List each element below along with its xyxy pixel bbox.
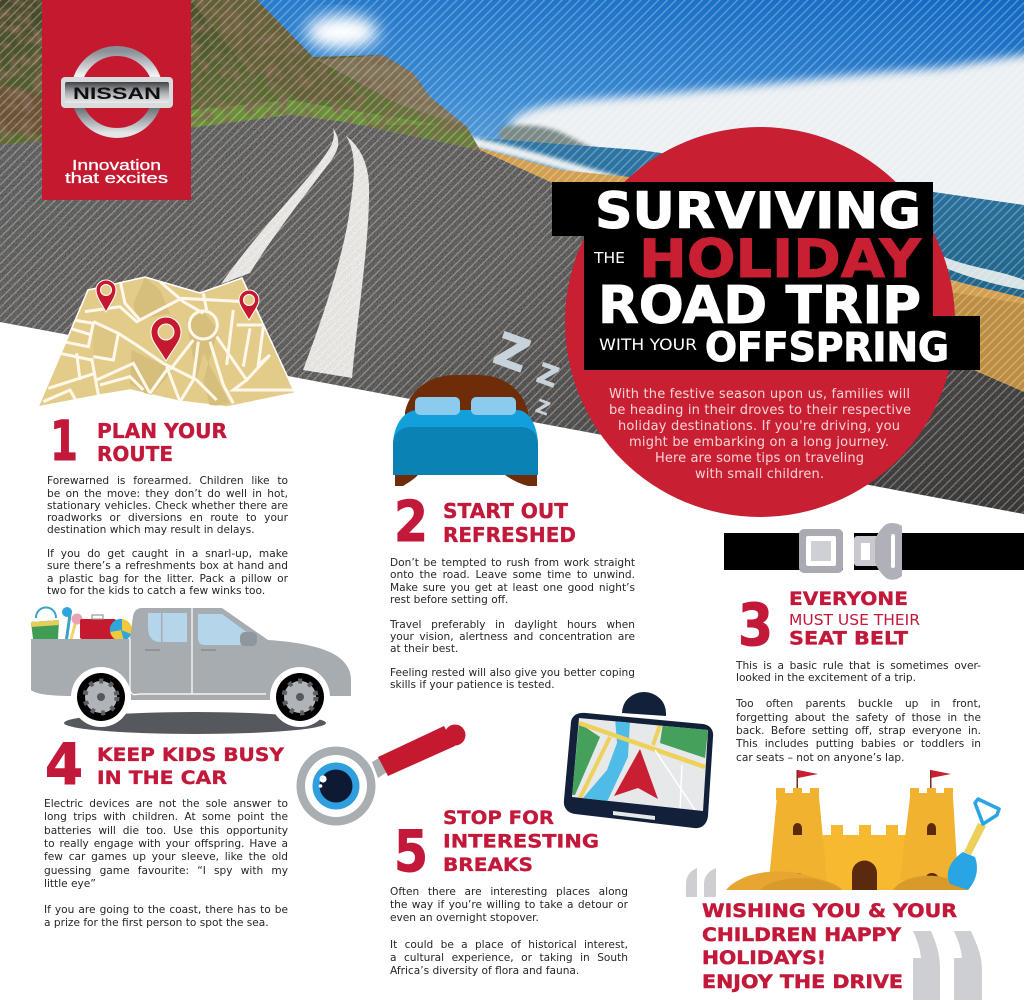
text block xyxy=(47,548,288,597)
closing message: ENJOY THE DRIVE xyxy=(702,972,903,993)
icon: magnifying glass with eye xyxy=(296,724,466,826)
icon: Nissan ring emblem xyxy=(61,51,173,133)
icon: gps navigator xyxy=(564,692,713,828)
text block: be on the move: they don’t do well in hot, xyxy=(47,488,288,500)
heading: 1 plan your route xyxy=(50,409,227,473)
text block xyxy=(44,904,288,929)
heading: 2 start out refreshed: 2 xyxy=(394,490,428,555)
heading: 1 plan your route: PLAN YOUR xyxy=(97,419,227,443)
text block xyxy=(390,667,635,691)
panel: title and intro circle xyxy=(552,127,980,517)
text block: rest before setting off. xyxy=(390,594,508,606)
heading: 3 everyone must use their seat belt: 3 xyxy=(738,591,773,659)
intro text: Here are some tips on traveling xyxy=(655,451,864,466)
text block: the way if you’re willing to take a detour or xyxy=(390,898,628,910)
icon: sandcastle with spade xyxy=(726,770,999,890)
text block: roadworks or diversions en route to your xyxy=(47,512,288,524)
heading: 5 stop for interesting breaks: STOP FOR xyxy=(443,807,554,829)
tagline: that excites xyxy=(65,171,168,187)
title banner xyxy=(552,182,980,371)
text block: your vision, alertness and concentration are xyxy=(390,631,635,643)
heading: 2 start out refreshed: START OUT xyxy=(443,499,568,523)
heading: 5 stop for interesting breaks: 5 xyxy=(394,819,428,885)
icon: folded map with pins xyxy=(38,277,295,407)
photo: coastal road background xyxy=(0,0,1024,514)
intro text: holiday destinations. If you're driving, you xyxy=(618,419,900,434)
text block: car seats – not on anyone’s lap. xyxy=(736,752,905,764)
text block: skills if your patience is tested. xyxy=(390,679,555,691)
text block: If you are going to the coast, there has to be xyxy=(44,904,288,916)
heading: 4 keep kids busy in the car: KEEP KIDS BUSY xyxy=(97,744,284,766)
text block: batteries will die too. Use this opportunity xyxy=(44,825,288,837)
intro text: with small children. xyxy=(695,467,824,482)
closing message: CHILDREN HAPPY xyxy=(702,925,902,946)
heading: 1 plan your route: ROUTE xyxy=(97,442,173,466)
pin xyxy=(239,290,259,320)
intro text xyxy=(609,387,911,482)
heading: 3 everyone must use their seat belt: MUST USE THEIR xyxy=(789,611,920,629)
text block: Make sure you get at least one good night’s xyxy=(390,582,635,594)
title banner: WITH YOUR xyxy=(599,335,697,354)
panel: 4 keep kids busy in the car xyxy=(31,606,466,929)
heading: 3 everyone must use their seat belt xyxy=(738,588,920,659)
intro text: might be embarking on a long journey. xyxy=(629,435,889,450)
intro text: be heading in their droves to their respective xyxy=(609,403,911,418)
text block xyxy=(736,698,981,764)
text block xyxy=(47,475,288,536)
text block: Feeling rested will also give you better coping xyxy=(390,667,635,679)
intro text: With the festive season upon us, families will xyxy=(609,387,910,402)
icon: pickup truck xyxy=(31,607,351,734)
icon: bed with z letters: Z xyxy=(532,395,553,421)
text block: destination which may result in delays. xyxy=(47,524,255,536)
text block: It could be a place of historical interest, xyxy=(390,938,628,950)
icon: bed with z letters xyxy=(393,322,563,486)
text block: few car games up your sleeve, like the old xyxy=(44,851,288,863)
wheel xyxy=(276,673,324,721)
wheel xyxy=(77,673,125,721)
closing message: HOLIDAYS! xyxy=(702,948,826,969)
icon: bed with z letters: Z xyxy=(533,356,563,394)
red circle xyxy=(565,127,955,517)
heading: 1 plan your route: 1 xyxy=(50,409,78,473)
heading: 4 keep kids busy in the car: IN THE CAR xyxy=(97,767,227,789)
panel: 2 start out refreshed xyxy=(390,322,635,691)
text block: Too often parents buckle up in front, xyxy=(736,698,981,710)
text block: a cultural experience, or taking in South xyxy=(390,952,628,964)
title banner: SURVIVING xyxy=(595,182,921,240)
heading: 5 stop for interesting breaks: BREAKS xyxy=(443,854,533,876)
heading: 5 stop for interesting breaks xyxy=(394,807,599,885)
panel: closing wish with sandcastle xyxy=(686,770,1001,1000)
text block: back. Before setting off, strap everyone in. xyxy=(736,725,981,737)
text block: little eye” xyxy=(44,878,96,890)
text block xyxy=(390,619,635,655)
text block: Forewarned is forearmed. Children like to xyxy=(47,475,288,487)
text block: Electric devices are not the sole answer to xyxy=(44,798,288,810)
text block: two for the kids to catch a few winks too. xyxy=(47,585,265,597)
text block: onto the road. Leave some time to unwind. xyxy=(390,569,635,581)
closing message: WISHING YOU & YOUR xyxy=(702,901,957,922)
text block: stationary vehicles. Check whether there are xyxy=(47,500,288,512)
pin xyxy=(151,317,181,361)
text block: even an overnight stopover. xyxy=(390,912,539,924)
text block xyxy=(390,938,628,976)
heading: 3 everyone must use their seat belt: EVERYONE xyxy=(789,588,908,610)
text block: This is a basic rule that is sometimes over- xyxy=(736,660,981,672)
heading: 2 start out refreshed: REFRESHED xyxy=(443,523,576,547)
text block: forgetting about the safety of those in the xyxy=(736,712,981,724)
tagline xyxy=(65,158,168,187)
brand panel: Nissan logo xyxy=(42,0,191,200)
text block: to really engage with your offspring. Have a xyxy=(44,838,288,850)
text block: looked in the excitement of a trip. xyxy=(736,672,916,684)
heading: 2 start out refreshed xyxy=(394,490,576,555)
text block: Often there are interesting places along xyxy=(390,886,628,898)
title banner: ROAD TRIP xyxy=(598,276,921,336)
panel: 1 plan your route xyxy=(39,276,294,597)
text block: Travel preferably in daylight hours when xyxy=(390,619,635,631)
icon: closing quote mark xyxy=(913,931,982,1000)
text block: long trips with children. At some point the xyxy=(44,811,288,823)
text block: sure there’s a refreshments box at hand and xyxy=(47,560,288,572)
text block: a prize for the first person to spot the sea. xyxy=(44,917,269,929)
closing message xyxy=(702,901,957,993)
icon: Nissan ring emblem: NISSAN xyxy=(73,84,161,103)
text block: Don’t be tempted to rush from work straight xyxy=(390,557,635,569)
text block xyxy=(390,557,635,606)
heading: 3 everyone must use their seat belt: SEAT BELT xyxy=(789,628,908,650)
panel: 5 stop for interesting breaks xyxy=(390,692,714,976)
text block xyxy=(44,798,288,890)
text block: Africa’s diversity of flora and fauna. xyxy=(390,964,579,976)
text block: a plastic bag for the litter. Pack a pillow or xyxy=(47,573,288,585)
text block xyxy=(736,660,981,684)
icon: seat belt buckle xyxy=(724,523,1024,580)
text block xyxy=(390,886,628,924)
heading: 4 keep kids busy in the car: 4 xyxy=(45,732,83,798)
text block: If you do get caught in a snarl-up, make xyxy=(47,548,288,560)
text block: This includes putting babies or toddlers in xyxy=(736,738,981,750)
pin xyxy=(96,280,116,312)
title banner: HOLIDAY xyxy=(639,229,922,290)
title banner: OFFSPRING xyxy=(705,325,949,371)
text block: at their best. xyxy=(390,643,458,655)
panel: 3 everyone must use their seat belt xyxy=(724,523,1024,764)
beach toys xyxy=(31,607,132,641)
icon: bed with z letters: Z xyxy=(487,322,536,383)
heading: 4 keep kids busy in the car xyxy=(45,732,284,798)
title banner: THE xyxy=(593,249,625,267)
heading: 5 stop for interesting breaks: INTERESTING xyxy=(443,830,599,852)
icon: opening quote mark xyxy=(686,868,716,897)
tagline: Innovation xyxy=(72,158,161,174)
text block: guessing game favourite: “I spy with my xyxy=(44,865,288,877)
